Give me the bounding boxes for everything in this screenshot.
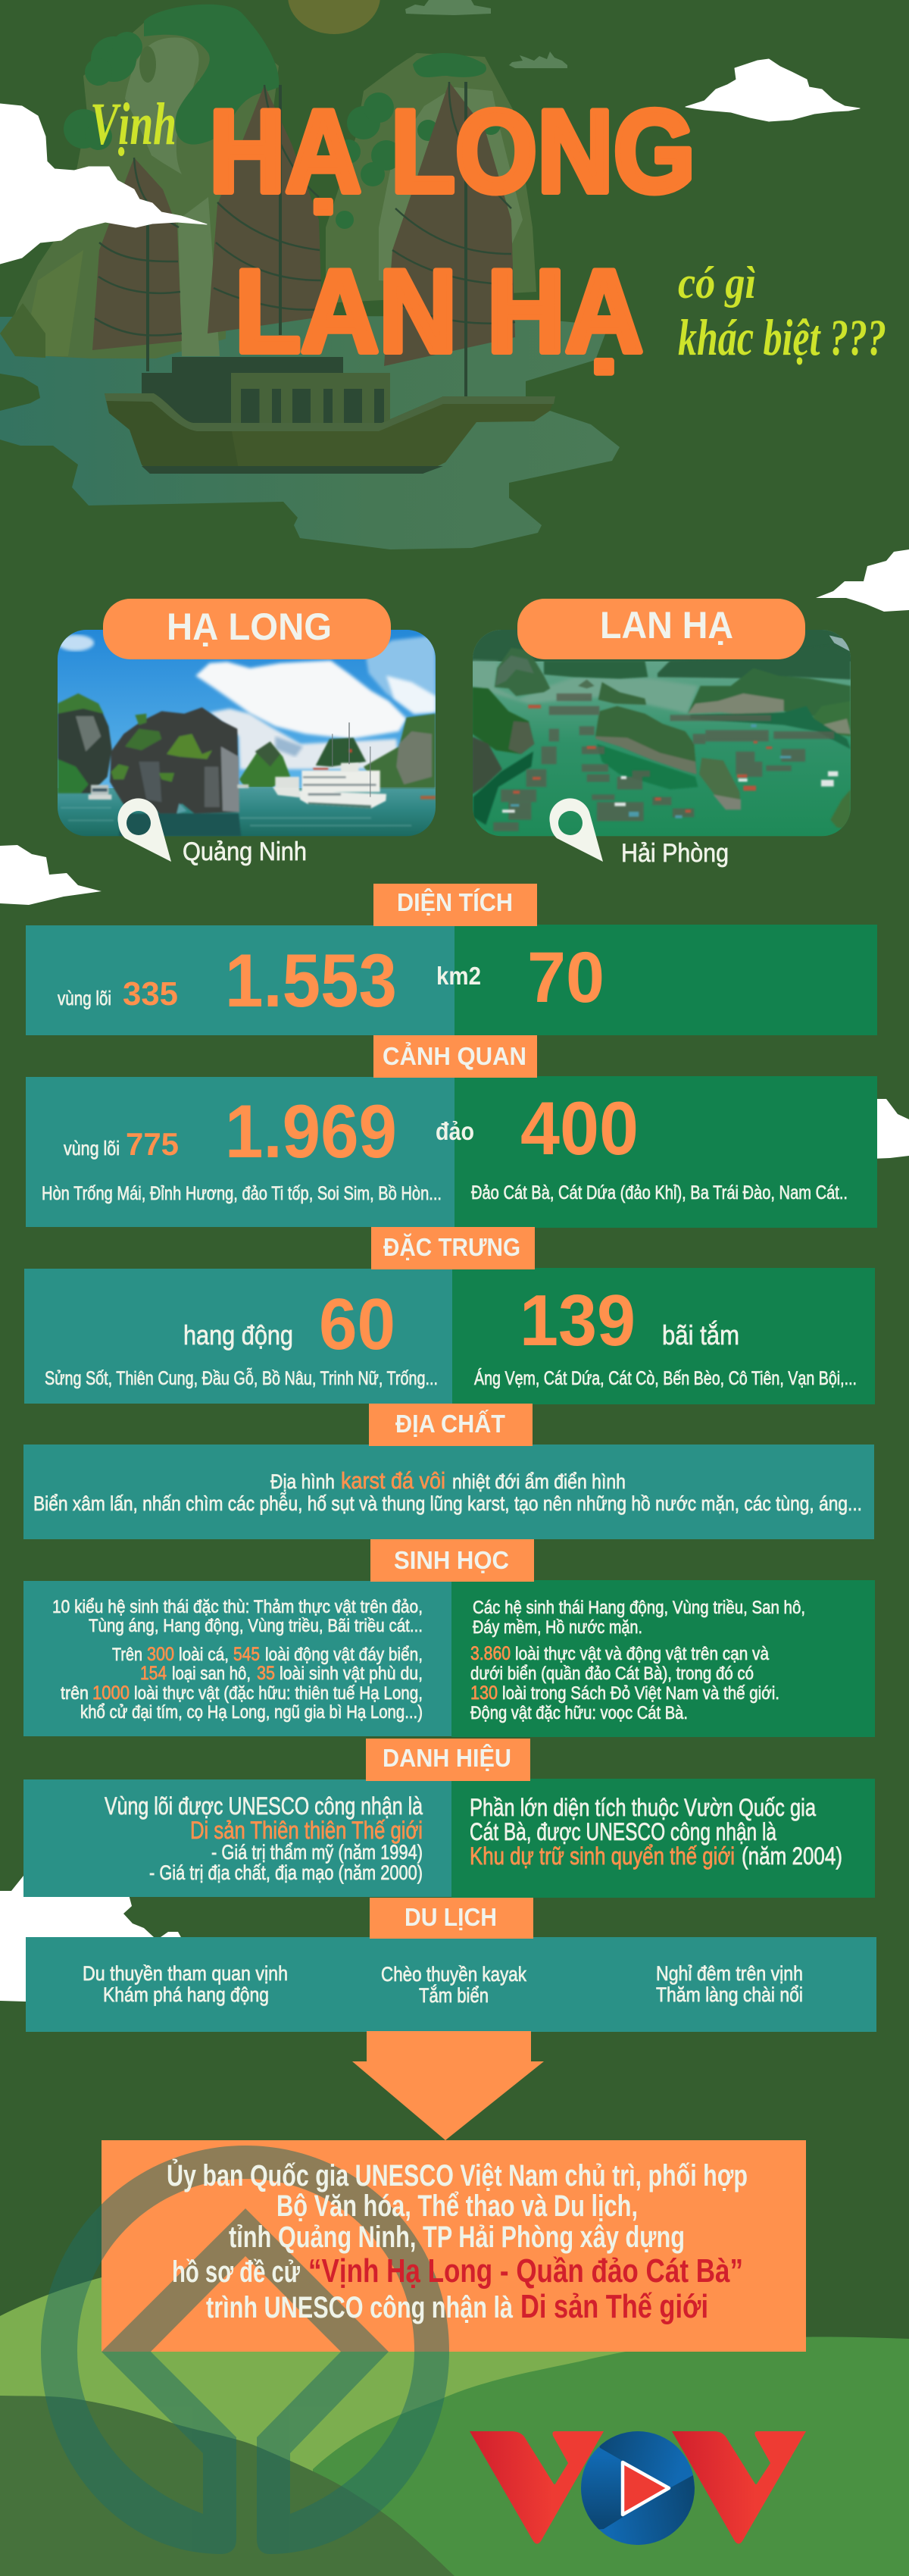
heading: [373, 1035, 537, 1078]
photo: Lan Hạ bay: [472, 630, 851, 836]
cloud: left bottom behind panels: [0, 1876, 182, 2002]
tourism column 2: Tắm biển: [419, 1983, 489, 2007]
UNESCO title Hạ Long: - Giá trị thẩm mỹ (năm 1994): [211, 1841, 423, 1864]
Hạ Long biology text: 35: [257, 1663, 275, 1684]
heading: DANH HIỆU: [383, 1744, 511, 1772]
UNESCO title Cát Bà: Phần lớn diện tích thuộc Vườn Quốc gia: [470, 1794, 816, 1821]
Hạ Long biology text: loài thực vật (đặc hữu: thiên tuế Hạ Long,: [134, 1683, 423, 1704]
heading: [366, 1739, 530, 1781]
callout box: [102, 2140, 806, 2352]
title: [90, 86, 886, 377]
UNESCO title Hạ Long: Di sản Thiên thiên Thế giới: [190, 1817, 423, 1844]
heading: SINH HỌC: [394, 1546, 509, 1574]
emblem: watermark logo: [41, 2146, 449, 2554]
panel: Diện tích: [26, 884, 877, 1035]
heading: CẢNH QUAN: [383, 1042, 526, 1070]
callout text: hồ sơ đề cử: [172, 2255, 300, 2289]
boat: [105, 357, 555, 474]
island names left: Hòn Trống Mái, Đỉnh Hương, đảo Ti tốp, Soi Sim, Bồ Hòn...: [42, 1183, 442, 1204]
pill: Hạ Long: HẠ LONG: [167, 606, 332, 648]
beaches label: bãi tắm: [662, 1319, 739, 1351]
Lan Hạ biology text: 3.860: [470, 1643, 511, 1664]
Hạ Long biology text: 300: [147, 1644, 174, 1665]
UNESCO title Hạ Long: Vùng lõi được UNESCO công nhận là: [105, 1792, 423, 1820]
Hạ Long islands: 1.969: [225, 1089, 397, 1173]
title word: Lan Hạ: LAN HẠ: [235, 246, 643, 377]
location: Hải Phòng: [549, 798, 729, 868]
photo: Hạ Long bay: [58, 630, 436, 836]
Hạ Long biology text: 545: [233, 1644, 260, 1665]
heading: ĐẶC TRƯNG: [383, 1233, 520, 1261]
callout text: Ủy ban Quốc gia UNESCO Việt Nam chủ trì, phối hợp: [167, 2158, 748, 2193]
UNESCO title Hạ Long: - Giá trị địa chất, địa mạo (năm 2000): [149, 1861, 423, 1884]
cloud: right behind panel: [871, 1099, 909, 1159]
panel: Đặc trưng: [24, 1227, 875, 1404]
cloud: left: [0, 104, 207, 264]
icon: map pin: [117, 798, 171, 862]
unit: đảo: [436, 1117, 474, 1145]
UNESCO title Cát Bà: Cát Bà, được UNESCO công nhận là: [470, 1818, 776, 1845]
cave names: Sửng Sốt, Thiên Cung, Đầu Gỗ, Bồ Nâu, Trinh Nữ, Trống...: [45, 1367, 438, 1389]
Hạ Long biology text: loại san hô,: [172, 1664, 251, 1684]
illustration: bay scene with junk boat: [0, 0, 620, 549]
Hạ Long biology text: trên: [61, 1683, 89, 1704]
Lan Hạ biology text: loài thực vật và động vật trên cạn và: [515, 1644, 770, 1664]
title words: có gì: có gì: [678, 258, 756, 308]
heading: [373, 884, 537, 926]
place name: Hải Phòng: [621, 839, 729, 868]
icon: map pin: [549, 798, 603, 862]
Lan Hạ biology text: 130: [470, 1682, 498, 1704]
cloud: top right: [686, 59, 860, 121]
callout text: “Vịnh Hạ Long - Quần đảo Cát Bà”: [308, 2252, 743, 2290]
pill: Lan Hạ: [517, 599, 805, 659]
panel: Địa chất: [23, 1404, 874, 1539]
core area label: vùng lõi: [58, 987, 111, 1009]
heading: ĐỊA CHẤT: [395, 1410, 505, 1438]
caves value: 60: [319, 1284, 395, 1365]
callout text: Bộ Văn hóa, Thể thao và Du lịch,: [276, 2189, 638, 2223]
core area value: 335: [123, 975, 178, 1013]
Hạ Long biology text: 154: [140, 1663, 167, 1684]
sails: [92, 82, 515, 396]
karst rock right: [326, 53, 536, 303]
cloud: right mid: [816, 549, 909, 612]
pill: Hạ Long: [103, 599, 391, 659]
Lan Hạ area: 70: [527, 937, 604, 1018]
arrow: pointing down: [352, 2031, 544, 2140]
panel: Du lịch: [26, 1898, 876, 2032]
Hạ Long biology text: Trên: [112, 1645, 142, 1665]
Hạ Long biology text: [52, 1597, 423, 1723]
tourism column 1: Du thuyền tham quan vịnh: [83, 1962, 288, 1985]
geology line 1: karst đá vôi: [341, 1467, 445, 1494]
tourism column 1: Khám phá hang động: [103, 1983, 269, 2006]
tourism column 3: Nghỉ đêm trên vịnh: [656, 1962, 803, 1985]
Lan Hạ islands: 400: [520, 1086, 639, 1170]
tourism column 3: [656, 1962, 803, 2006]
karst rock left: [0, 5, 279, 358]
geology line 1: [270, 1467, 626, 1494]
place name: Quảng Ninh: [183, 837, 307, 866]
Hạ Long biology text: 10 kiểu hệ sinh thái đặc thù: Thảm thực vật trên đảo,: [52, 1597, 423, 1617]
Hạ Long biology text: loài sinh vật phù du,: [280, 1664, 423, 1684]
logo: VOV: [470, 2431, 806, 2545]
tourism column 3: Thăm làng chài nổi: [656, 1983, 803, 2006]
panel: Sinh học: [23, 1539, 875, 1737]
tourism column 2: [381, 1963, 526, 2007]
heading: [371, 1227, 535, 1269]
caves label: hang động: [183, 1319, 293, 1351]
heading: [370, 1539, 534, 1582]
left shore: [0, 374, 40, 411]
Lan Hạ biology text: Động vật đặc hữu: voọc Cát Bà.: [470, 1703, 688, 1723]
callout text: [167, 2158, 748, 2325]
Lan Hạ biology text: loài trong Sách Đỏ Việt Nam và thế giới.: [502, 1683, 779, 1704]
geology line 1: Địa hình: [270, 1470, 335, 1493]
water: [0, 316, 620, 549]
panel: Danh hiệu: [23, 1739, 875, 1898]
UNESCO title Cát Bà: [470, 1794, 842, 1870]
Hạ Long biology text: loài động vật đáy biển,: [265, 1645, 423, 1665]
geology line 1: nhiệt đới ẩm điển hình: [452, 1470, 626, 1493]
Lan Hạ biology text: Đáy mềm, Hồ nước mặn.: [473, 1617, 642, 1638]
Lan Hạ biology text: [470, 1598, 805, 1723]
hills: [0, 2243, 909, 2576]
callout text: trình UNESCO công nhận là: [206, 2291, 514, 2324]
title word: Vịnh: Vịnh: [90, 92, 176, 158]
heading: DIỆN TÍCH: [397, 888, 513, 916]
faint clouds: [405, 0, 567, 68]
title word: Hạ Long: HẠ LONG: [209, 86, 695, 217]
UNESCO title Hạ Long: [105, 1792, 423, 1884]
UNESCO title Cát Bà: (năm 2004): [742, 1842, 842, 1870]
callout text: tỉnh Quảng Ninh, TP Hải Phòng xây dựng: [229, 2221, 685, 2254]
Hạ Long area: 1.553: [225, 938, 397, 1022]
core value: 775: [126, 1126, 179, 1162]
Hạ Long biology text: 1000: [92, 1682, 130, 1704]
beaches value: 139: [520, 1280, 636, 1361]
panel: Cảnh quan: [26, 1035, 877, 1228]
sun: [288, 0, 380, 34]
callout text: Di sản Thế giới: [520, 2288, 708, 2325]
cloud: left mid: [0, 845, 102, 905]
Lan Hạ biology text: dưới biển (quần đảo Cát Bà), trong đó có: [470, 1664, 754, 1684]
location: Quảng Ninh: [117, 798, 307, 866]
heading: [370, 1898, 533, 1939]
Hạ Long biology text: loài cá,: [179, 1645, 229, 1665]
Hạ Long biology text: khổ cử đại tím, cọ Hạ Long, ngũ gia bì Hạ Long...): [80, 1702, 423, 1723]
Hạ Long biology text: Tùng áng, Hang động, Vùng triều, Bãi triều cát...: [89, 1616, 423, 1636]
pill: Lan Hạ: LAN HẠ: [600, 604, 733, 646]
Lan Hạ biology text: Các hệ sinh thái Hang động, Vùng triều, San hô,: [473, 1598, 805, 1618]
UNESCO title Cát Bà: Khu dự trữ sinh quyển thế giới: [470, 1842, 735, 1870]
tourism column 1: [83, 1962, 288, 2006]
tourism column 2: Chèo thuyền kayak: [381, 1963, 526, 1986]
heading: DU LỊCH: [405, 1903, 497, 1931]
heading: [369, 1404, 533, 1446]
unit: km2: [436, 962, 481, 990]
core label: vùng lõi: [64, 1137, 120, 1160]
